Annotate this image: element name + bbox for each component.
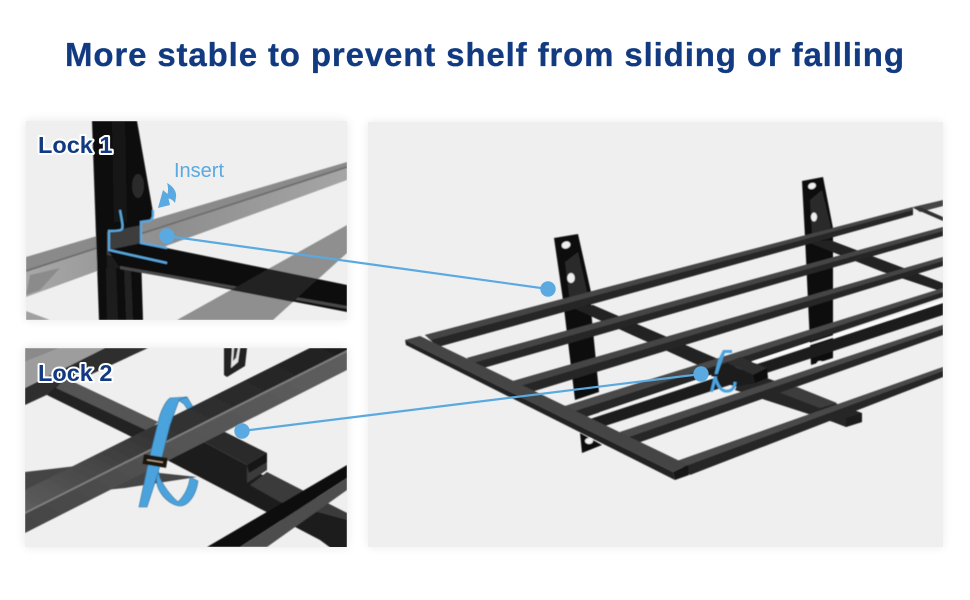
shelf rail 1 — [425, 207, 913, 347]
main diagonal rail — [25, 348, 347, 533]
label: Lock 1: Lock 1 — [38, 132, 112, 158]
sleeve tube — [708, 360, 769, 388]
small wall bracket — [224, 348, 247, 377]
mini blue strap — [710, 350, 735, 392]
blue cable strap — [139, 397, 187, 507]
square sleeve tube — [197, 431, 268, 483]
blue lock outline — [109, 210, 167, 263]
underside support bar — [590, 300, 943, 427]
lower right rail — [207, 465, 347, 547]
label: Insert: Insert — [174, 160, 224, 182]
corner rail fragment — [26, 311, 50, 320]
strap buckle — [142, 454, 168, 468]
panel: full shelf view — [368, 122, 943, 547]
callout line: lock 1 — [159, 228, 556, 297]
black upright bracket — [92, 121, 153, 320]
shelf rail 4 — [565, 288, 943, 419]
cross rail under main rail — [47, 378, 347, 560]
front bar — [405, 336, 689, 480]
shelf rail 2 — [467, 227, 943, 369]
wall bracket right — [802, 177, 833, 365]
shelf rail 3 — [513, 257, 943, 393]
translucent shelf rail — [26, 162, 347, 297]
strap back loop — [156, 397, 198, 506]
icon: curved insert arrow — [158, 183, 176, 208]
lower translucent rail — [177, 225, 347, 320]
rear end rails — [913, 200, 943, 221]
wall bracket left — [554, 234, 602, 453]
shelf rail 6 — [677, 367, 943, 475]
lower left rail — [25, 466, 197, 490]
center cross bars — [573, 240, 943, 427]
panel: lock 2 detail — [25, 348, 347, 560]
shelf rail 5 — [620, 325, 943, 445]
callout line: lock 2 — [234, 366, 709, 439]
black shelf rail — [108, 243, 347, 312]
top left rail — [25, 348, 148, 405]
label: Lock 2: Lock 2 — [38, 360, 112, 386]
panel: lock 1 detail — [26, 121, 347, 320]
title: More stable to prevent shelf from sliding or fallling — [65, 36, 904, 73]
